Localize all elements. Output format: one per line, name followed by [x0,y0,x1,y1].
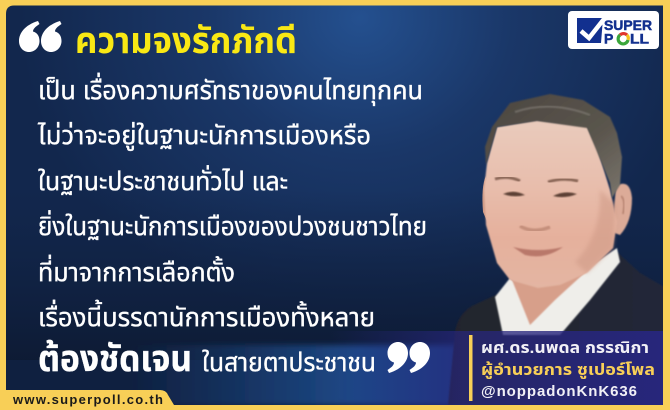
icon: opening quote mark [19,21,62,52]
quote body text: ยิ่งในฐานะนักการเมืองของปวงชนชาวไทย [38,210,427,241]
quote body text [37,72,427,379]
quote body text: ไม่ว่าจะอยู่ในฐานะนักการเมืองหรือ [37,120,371,151]
quote body text: ในสายตาประชาชน [202,347,376,377]
face [484,120,617,288]
icon: check box [577,18,604,43]
purple caption band [330,331,664,405]
photo: man in dark suit [448,94,664,405]
quote body text: ที่มาจากการเลือกตั้ง [38,254,235,287]
hair [485,94,622,198]
icon: coloured O [618,34,628,44]
caption: name and role [481,340,655,400]
logo: Super Poll: LL [630,30,649,46]
icon: closing quote mark [388,342,430,373]
mouth [513,247,563,256]
caption accent bar [469,335,472,401]
logo: Super Poll: P [604,30,613,46]
shirt collar [495,248,620,335]
cheek shading [575,190,616,273]
quote body text: เป็น เรื่องความศรัทธาของคนไทยทุกคน [38,72,423,106]
logo: Super Poll [568,11,659,49]
neck [512,274,584,326]
hair highlight [515,107,590,115]
logo: Super Poll: SUPER [604,17,652,33]
nose [520,226,550,230]
jacket [448,252,664,405]
caption: name and role: ผศ.ดร.นพดล กรรณิกา [481,340,649,357]
quote body text: เรื่องนี้บรรดานักการเมืองทั้งหลาย [38,299,375,332]
left ear [482,176,487,220]
title: ความจงรักภักดี [75,20,297,61]
footer tab [0,390,670,410]
eyes [503,192,525,196]
website url: www.superpoll.co.th [12,392,163,407]
quote body text: ต้องชัดเจน [38,338,192,379]
eyebrows [495,177,520,181]
quote body text: ในฐานะประชาชนทั่วไป และ [38,164,288,196]
caption: name and role: @noppadonKnK636 [481,383,637,400]
right ear [612,184,632,235]
caption: name and role: ผู้อำนวยการ ซูเปอร์โพล [481,361,655,380]
